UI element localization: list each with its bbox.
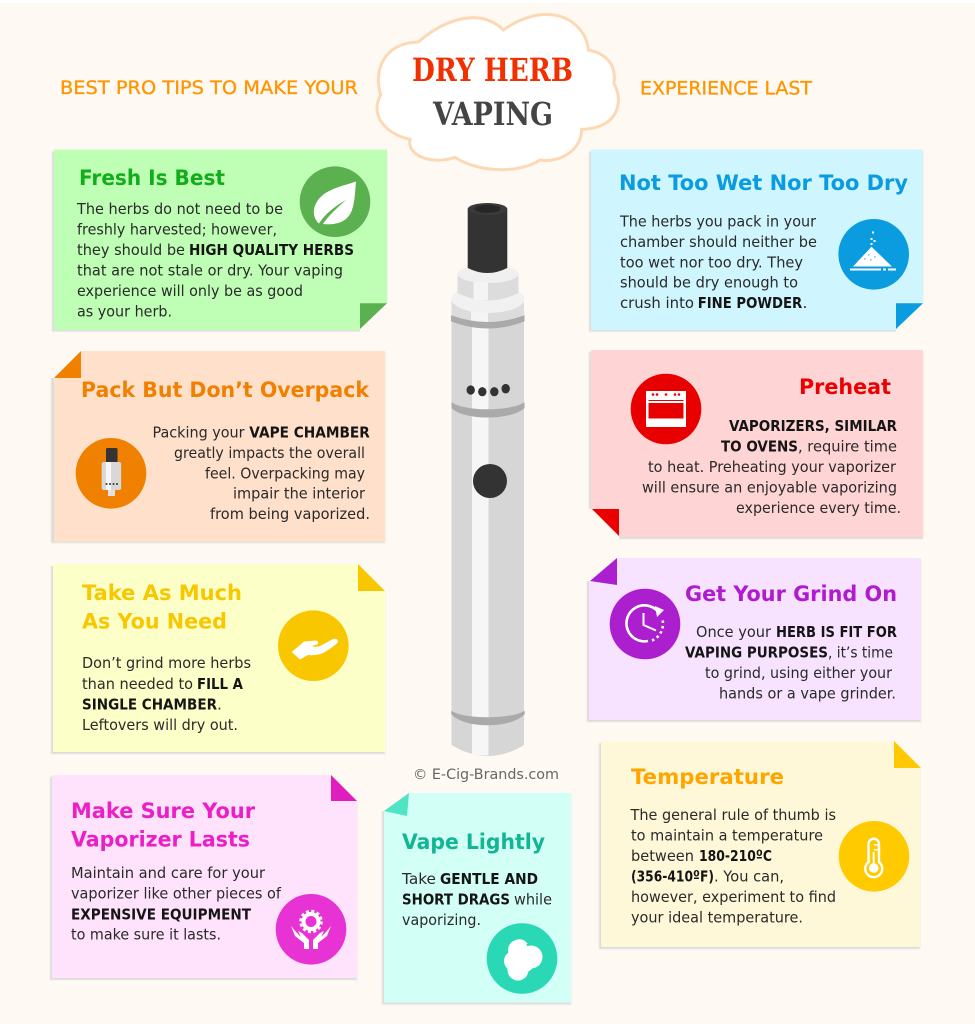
icon: gear in hands	[276, 894, 346, 965]
heading: right tagline: EXPERIENCE LAST	[640, 78, 812, 100]
icon: clock	[610, 589, 680, 659]
heading: Get Your Grind On	[685, 582, 897, 607]
body text: to make sure it lasts.	[71, 926, 221, 944]
band 3	[452, 712, 524, 724]
icon: leaf	[300, 166, 370, 237]
upper collar	[458, 274, 518, 300]
body text: between	[631, 847, 694, 865]
band 1	[452, 316, 524, 328]
title line 1: DRY HERB	[412, 51, 573, 89]
title line 2: VAPING	[432, 95, 553, 133]
body text: impair the interior	[233, 485, 366, 503]
panel: preheat	[586, 350, 923, 542]
body text: , require time	[798, 438, 897, 456]
body text	[71, 864, 282, 944]
body text: feel. Overpacking may	[205, 464, 365, 482]
body text: VAPORIZERS, SIMILAR	[729, 417, 897, 435]
panel: vape lightly	[378, 789, 571, 1004]
body text: however, experiment to find	[631, 888, 836, 906]
body text: Take	[401, 870, 436, 888]
fold	[384, 793, 409, 816]
panel: pack but don't overpack	[47, 347, 385, 543]
heading: Preheat	[799, 375, 891, 400]
icon: atomizer	[76, 438, 146, 509]
body text: they should be	[77, 241, 185, 259]
body text: TO OVENS	[721, 438, 798, 456]
body text: to heat. Preheating your vaporizer	[648, 458, 897, 476]
body text: EXPENSIVE EQUIPMENT	[71, 906, 251, 924]
pen highlight stripe	[472, 310, 488, 756]
body text	[685, 623, 897, 702]
body text	[82, 654, 251, 734]
body text: (356-410ºF)	[631, 867, 714, 885]
body text: Maintain and care for your	[71, 864, 266, 882]
body text: that are not stale or dry. Your vaping	[77, 262, 343, 280]
icon: thermometer	[839, 821, 909, 892]
body text	[619, 212, 817, 312]
body text: your ideal temperature.	[631, 908, 803, 926]
body text: VAPING PURPOSES	[685, 644, 828, 662]
icon: open hand	[278, 610, 349, 681]
panel: temperature	[599, 737, 925, 949]
body text: freshly harvested; however,	[77, 220, 277, 238]
fold	[590, 558, 617, 585]
fold	[331, 775, 357, 801]
icon: oven	[631, 374, 701, 444]
body text: from being vaporized.	[210, 505, 370, 523]
body text: .	[217, 696, 222, 714]
heading: left tagline: BEST PRO TIPS TO MAKE YOUR	[60, 77, 358, 99]
heading: Temperature	[631, 765, 784, 790]
fold	[54, 351, 81, 378]
air holes	[466, 384, 510, 396]
body text: The herbs do not need to be	[76, 200, 283, 218]
body text: .	[802, 294, 807, 312]
band 2	[452, 403, 524, 417]
body text	[630, 806, 836, 926]
body text: will ensure an enjoyable vaporizing	[642, 478, 897, 496]
body text: Once your	[696, 623, 772, 641]
body text: , it’s time	[828, 644, 893, 662]
panel: take as much as you need	[51, 560, 389, 754]
icon: powder pile	[838, 219, 909, 290]
pen body	[452, 310, 524, 756]
body text: while	[514, 890, 552, 908]
icon: vapor cloud	[487, 923, 557, 994]
fire button	[473, 464, 507, 498]
body text: to grind, using either your	[705, 664, 893, 682]
heading	[82, 581, 242, 634]
heading: Fresh Is Best	[79, 166, 225, 191]
heading: Take As Much	[82, 581, 242, 606]
body text	[642, 417, 901, 517]
body text: FILL A	[197, 675, 243, 693]
body text: vaporizing.	[402, 911, 481, 929]
body text: vaporizer like other pieces of	[71, 885, 282, 903]
body text: Leftovers will dry out.	[82, 716, 238, 734]
body text: . You can,	[714, 867, 784, 885]
body text: too wet nor too dry. They	[620, 253, 803, 271]
body text: crush into	[620, 294, 694, 312]
mouthpiece	[468, 209, 507, 273]
body text: HIGH QUALITY HERBS	[189, 241, 354, 259]
body text: chamber should neither be	[620, 233, 817, 251]
title cloud	[377, 14, 618, 170]
heading	[71, 799, 255, 852]
heading: Not Too Wet Nor Too Dry	[619, 171, 908, 196]
body text: hands or a vape grinder.	[719, 684, 896, 702]
body text: than needed to	[82, 675, 193, 693]
body text: as your herb.	[77, 302, 172, 320]
vape pen illustration	[452, 203, 524, 756]
heading: As You Need	[82, 610, 227, 634]
cloud shape	[377, 14, 618, 170]
body text: greatly impacts the overall	[174, 444, 365, 462]
heading: Pack But Don’t Overpack	[81, 378, 370, 403]
heading: Vape Lightly	[402, 830, 545, 855]
body text: VAPE CHAMBER	[249, 424, 370, 442]
body text	[152, 424, 370, 523]
body text	[401, 870, 552, 929]
body text: 180-210ºC	[699, 847, 772, 865]
body text: experience will only be as good	[77, 282, 303, 300]
heading: Make Sure Your	[71, 799, 255, 824]
panel: make sure your vaporizer lasts	[50, 771, 361, 980]
body text: GENTLE AND	[440, 870, 538, 888]
fold	[592, 509, 619, 536]
body text: experience every time.	[736, 499, 901, 517]
body text: The general rule of thumb is	[630, 806, 836, 824]
body text: Don’t grind more herbs	[82, 654, 251, 672]
fold	[358, 564, 385, 591]
body text: SHORT DRAGS	[402, 890, 510, 908]
copyright: © E-Cig-Brands.com	[413, 767, 559, 783]
body text: should be dry enough to	[620, 274, 798, 292]
heading: Vaporizer Lasts	[71, 828, 250, 852]
fold	[894, 741, 921, 768]
panel: fresh is best	[52, 150, 391, 335]
body text: Packing your	[152, 424, 245, 442]
panel: get your grind on	[583, 554, 921, 722]
panel: not too wet nor too dry	[589, 150, 927, 335]
fold	[360, 303, 387, 329]
lower collar	[452, 297, 524, 326]
fold	[896, 303, 923, 329]
body text: FINE POWDER	[698, 294, 802, 312]
body text: The herbs you pack in your	[619, 212, 817, 230]
body text	[76, 200, 354, 320]
body text: to maintain a temperature	[631, 826, 823, 844]
body text: HERB IS FIT FOR	[776, 623, 897, 641]
body text: SINGLE CHAMBER	[82, 696, 217, 714]
